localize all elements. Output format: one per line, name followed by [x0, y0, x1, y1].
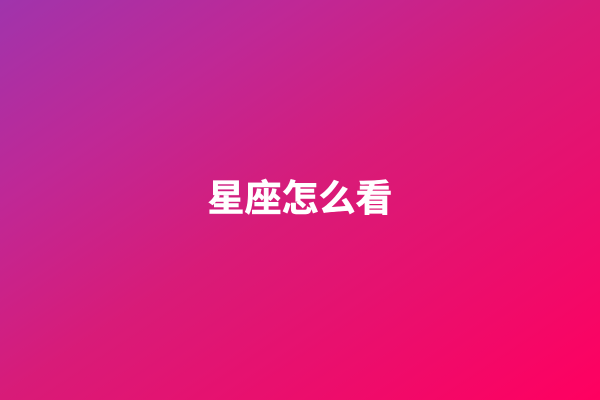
- title: 星座怎么看: [208, 178, 392, 219]
